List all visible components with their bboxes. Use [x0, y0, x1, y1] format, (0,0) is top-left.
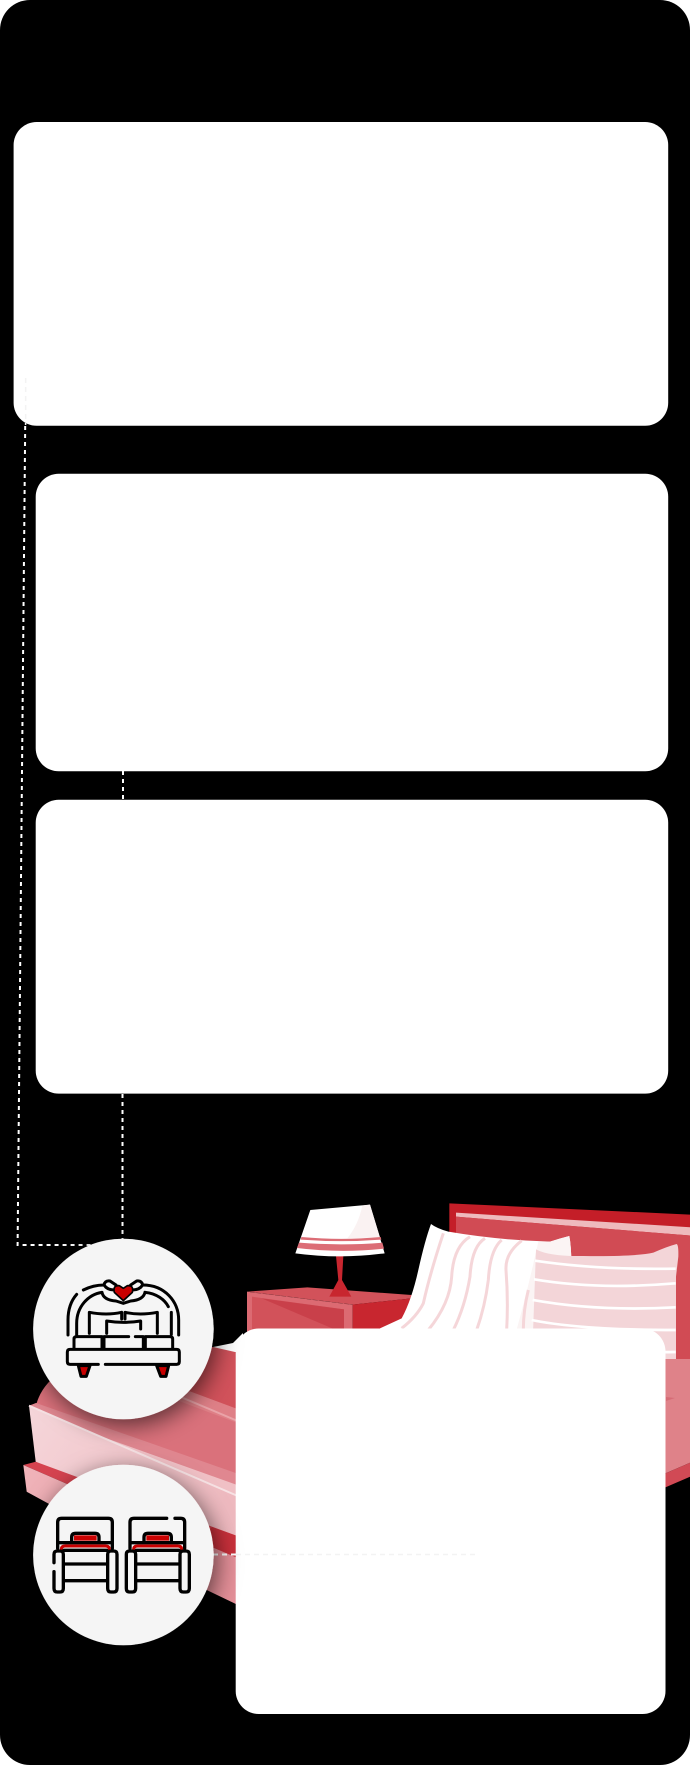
- illustration: bed, nightstand and lamp: [23, 1203, 690, 1606]
- bed blanket and frame, left side: [23, 1333, 243, 1606]
- right bed: [126, 1518, 189, 1592]
- left bed: [54, 1518, 117, 1592]
- card 3: [36, 800, 668, 1094]
- lamp: [295, 1205, 385, 1297]
- card 1: [14, 122, 668, 426]
- card 4: [236, 1328, 665, 1714]
- circle badge: double bed: [33, 1239, 214, 1419]
- icon: twin beds: [54, 1518, 189, 1592]
- back pillow with stripes: [377, 1224, 571, 1363]
- dashed connector lines: [18, 426, 123, 1245]
- nightstand: [247, 1287, 412, 1363]
- front pillow with stripes: [532, 1244, 678, 1371]
- dashed connector from twin beds icon: [213, 1554, 236, 1556]
- bed mattress and frame, right side: [650, 1359, 690, 1494]
- nightstand and headboard: [247, 1203, 690, 1397]
- circle badge: twin beds: [33, 1465, 214, 1645]
- card 2: [36, 474, 668, 771]
- faint dashes showing through cards: [26, 378, 475, 1554]
- icon: double bed with heart: [67, 1281, 179, 1376]
- headboard: [449, 1203, 690, 1397]
